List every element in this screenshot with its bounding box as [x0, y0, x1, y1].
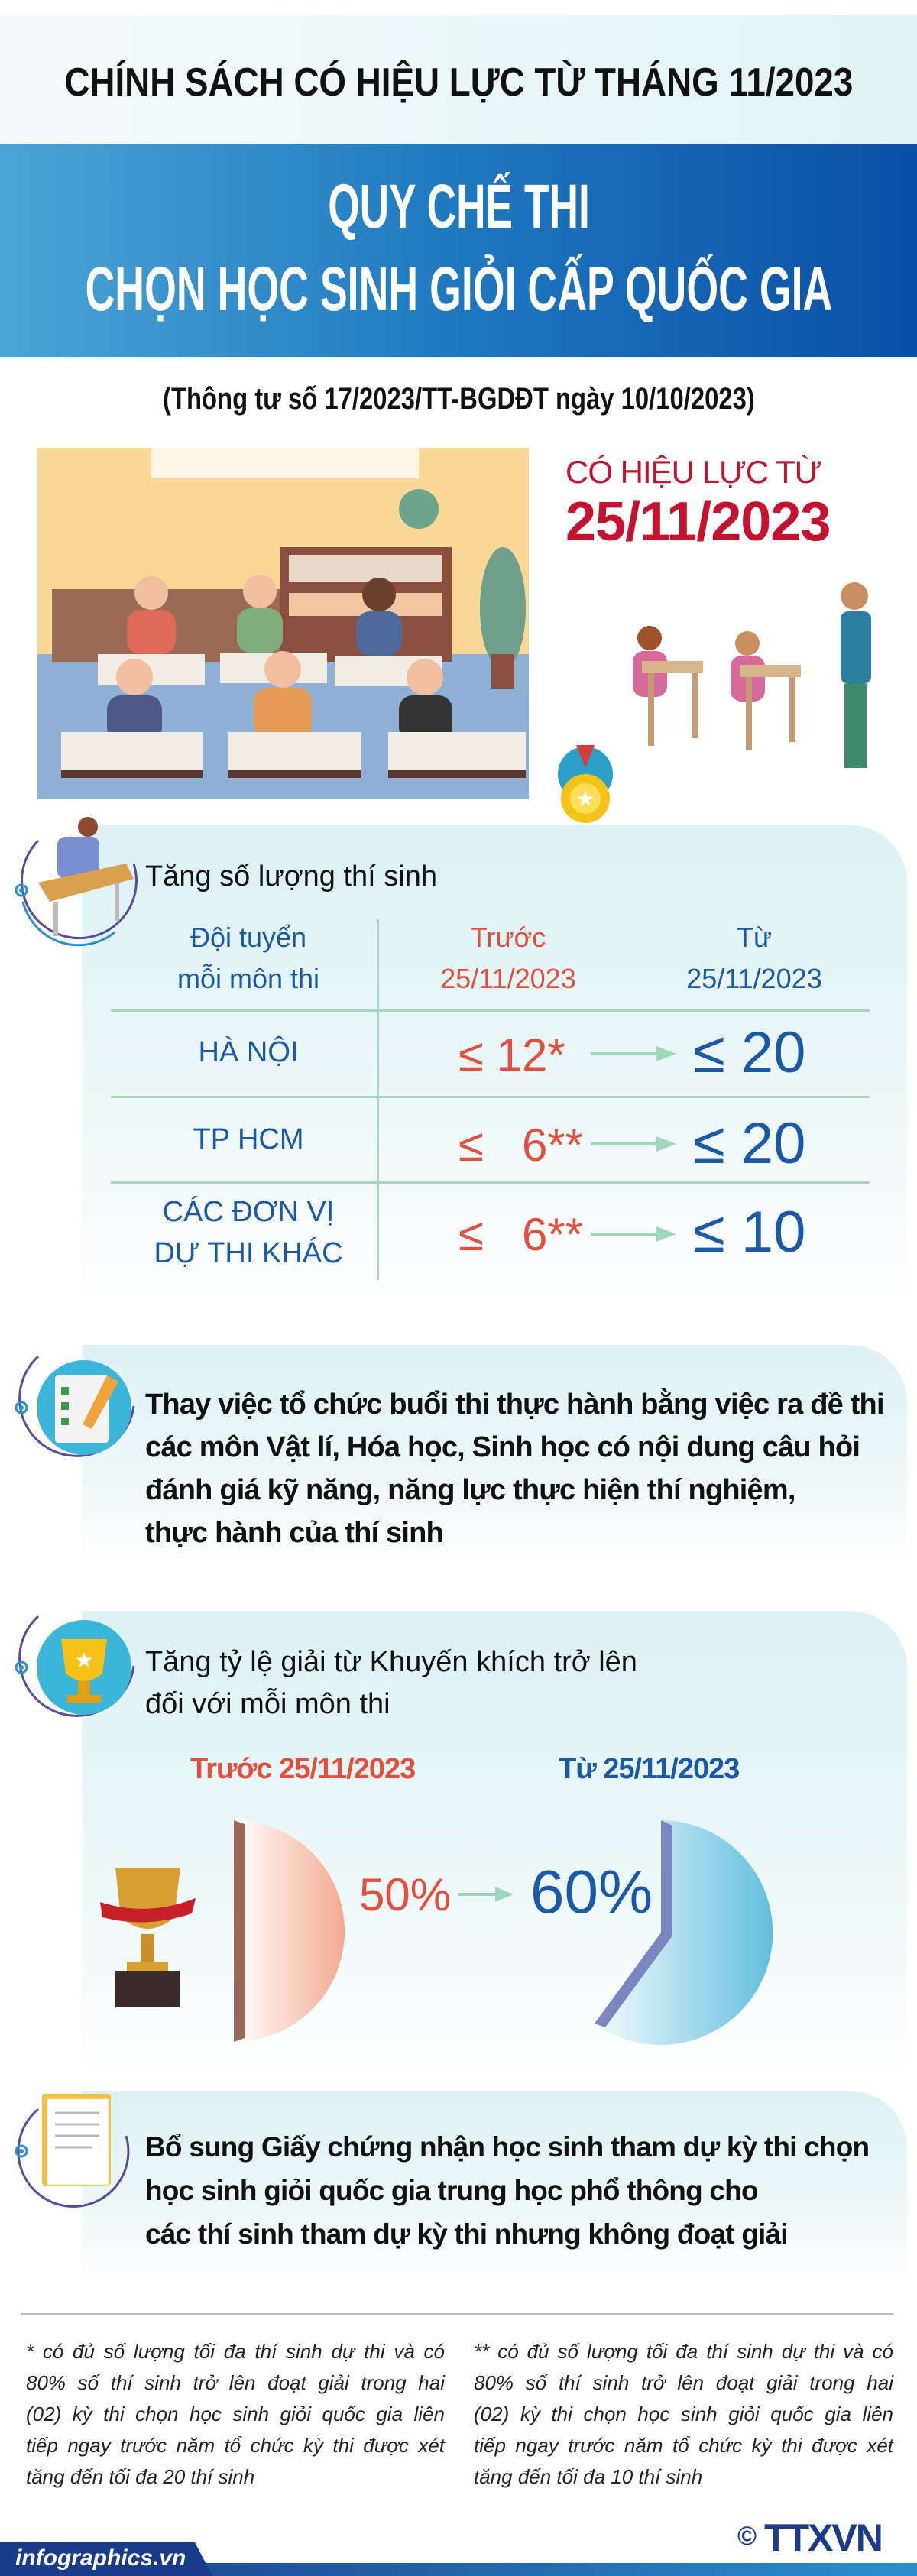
footnote: double asterisk: 80% số thí sinh trở lên đoạt giải trong hai [474, 2371, 893, 2394]
text block [145, 1388, 884, 1549]
row: other units: CÁC ĐƠN VỊ [163, 1196, 334, 1228]
chart: 50% half pie [234, 1820, 345, 2042]
header col2 [440, 922, 576, 994]
value: 50%: 50% [359, 1869, 451, 1920]
header col1: mỗi môn thi [177, 963, 319, 994]
heading: policy effective: CHÍNH SÁCH CÓ HIỆU LỰC TỪ THÁNG 11/2023 [64, 60, 853, 105]
footnote: single asterisk: 80% số thí sinh trở lên đoạt giải trong hai [26, 2371, 445, 2394]
row: TP HCM [193, 1111, 805, 1176]
header col2: Trước [471, 922, 546, 953]
footnote: double asterisk: (02) kỳ thi chọn học sinh giỏi quốc gia liên [474, 2403, 893, 2425]
panel: certificate [82, 2091, 907, 2289]
title banner [0, 144, 917, 357]
text block [145, 2131, 869, 2250]
text block: Bổ sung Giấy chứng nhận học sinh tham dự kỳ thi chọn [145, 2131, 869, 2163]
chart: 60% pie [595, 1820, 773, 2045]
row: other units: ≤ 6** [458, 1209, 583, 1260]
heading: Tăng tỷ lệ giải từ Khuyến khích trở lên [145, 1646, 637, 1678]
title text: CHỌN HỌC SINH GIỎI CẤP QUỐC GIA [85, 254, 832, 324]
header col3: Từ [737, 922, 772, 953]
row: other units: ≤ 10 [693, 1200, 805, 1265]
panel: practical exam replacement [82, 1345, 907, 1567]
illustration: students at desks and teacher [633, 582, 871, 768]
row: other units: DỰ THI KHÁC [154, 1237, 343, 1269]
footnote: single asterisk: * có đủ số lượng tối đa thí sinh dự thi và có [26, 2340, 445, 2363]
illustration: classroom [37, 448, 529, 799]
header col2: 25/11/2023 [440, 963, 576, 994]
effective date callout: 25/11/2023 [565, 491, 830, 552]
footnote: double asterisk: ** có đủ số lượng tối đa thí sinh dự thi và có [474, 2340, 893, 2363]
header col3 [686, 922, 822, 994]
icon: trophy badge: ★ [74, 1648, 94, 1672]
footer bar [0, 2563, 917, 2576]
row: other units [154, 1196, 805, 1269]
heading: Tăng số lượng thí sinh [145, 860, 437, 893]
text block: các thí sinh tham dự kỳ thi nhưng không đoạt giải [145, 2218, 788, 2250]
arrow [458, 1887, 514, 1902]
text block: các môn Vật lí, Hóa học, Sinh học có nội dung câu hỏi [145, 1431, 860, 1463]
label: after: Từ 25/11/2023 [559, 1753, 739, 1785]
heading: đối với mỗi môn thi [145, 1688, 390, 1720]
title text: QUY CHẾ THI [328, 172, 589, 241]
footnote: single asterisk: tăng đến tối đa 20 thí sinh [26, 2465, 254, 2488]
row: Ha Noi: ≤ 20 [693, 1020, 805, 1085]
footer site tab [0, 2542, 212, 2576]
text block: Thay việc tổ chức buổi thi thực hành bằng việc ra đề thi [145, 1388, 884, 1421]
icon: trophy badge [15, 1615, 134, 1717]
panel: increase candidates [82, 825, 907, 1314]
icon: checklist [15, 1356, 134, 1457]
footnote: double asterisk [474, 2340, 894, 2488]
table [111, 919, 870, 1280]
effective date callout: CÓ HIỆU LỰC TỪ [565, 454, 821, 490]
header col1 [177, 922, 319, 994]
heading [145, 1646, 637, 1720]
row: Ha Noi: HÀ NỘI [199, 1036, 298, 1068]
icon: medal [558, 745, 613, 823]
logo: TTXVN: © TTXVN [737, 2516, 882, 2559]
row: TP HCM: TP HCM [193, 1123, 303, 1155]
icon: certificate document [15, 2094, 130, 2208]
row: Ha Noi: ≤ 12* [458, 1029, 565, 1081]
footnote: single asterisk: (02) kỳ thi chọn học sinh giỏi quốc gia liên [26, 2403, 445, 2425]
effective date callout [565, 454, 830, 552]
label: before: Trước 25/11/2023 [190, 1753, 415, 1785]
row: Ha Noi [199, 1020, 805, 1085]
row: TP HCM: ≤ 6** [458, 1120, 583, 1171]
text block: thực hành của thí sinh [145, 1517, 443, 1549]
header col1: Đội tuyển [190, 922, 306, 953]
icon: student at desk [15, 817, 138, 946]
value: 60%: 60% [530, 1858, 653, 1926]
title text [85, 172, 832, 324]
footnote: double asterisk: tăng đến tối đa 10 thí sinh [474, 2465, 702, 2488]
row: TP HCM: ≤ 20 [693, 1111, 805, 1176]
panel: award ratio [82, 1611, 907, 2085]
text block: học sinh giỏi quốc gia trung học phổ thông cho [145, 2175, 758, 2206]
footnote: single asterisk: tiếp ngay trước năm tổ chức kỳ thi được xét [26, 2434, 445, 2457]
text block: đánh giá kỹ năng, năng lực thực hiện thí nghiệm, [145, 1474, 795, 1506]
header col3: 25/11/2023 [686, 963, 822, 994]
top band [0, 15, 917, 145]
subtitle: (Thông tư số 17/2023/TT-BGDĐT ngày 10/10/2023) [163, 382, 754, 416]
icon: trophy [100, 1868, 196, 2007]
footnote: double asterisk: tiếp ngay trước năm tổ chức kỳ thi được xét [474, 2434, 893, 2457]
footer site tab: infographics.vn [15, 2545, 186, 2571]
footnote: single asterisk [26, 2340, 446, 2488]
icon: medal: ★ [575, 787, 595, 811]
